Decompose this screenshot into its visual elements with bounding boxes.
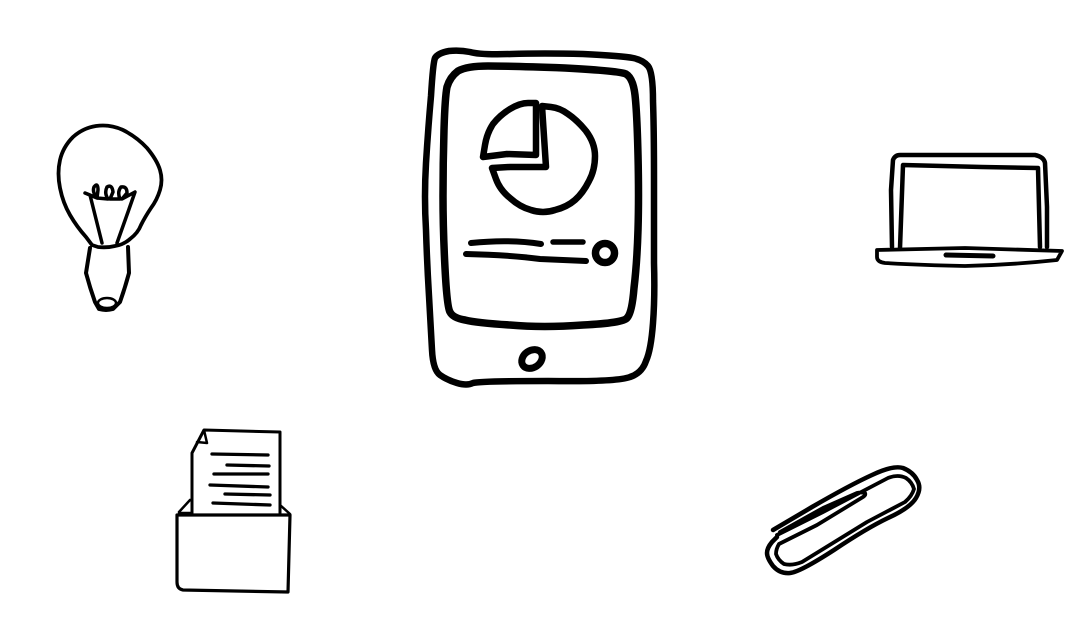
box front <box>177 515 290 592</box>
box right flap <box>280 505 290 514</box>
laptop lid outer <box>891 155 1047 247</box>
text line: top right <box>553 239 583 245</box>
icon: paper clip <box>767 467 919 573</box>
pie chart slice <box>483 103 536 157</box>
box left flap <box>179 500 192 513</box>
bulb base tip <box>98 298 116 308</box>
home button <box>518 346 546 372</box>
clip inner wire <box>776 476 914 565</box>
clip outer wire <box>767 467 919 573</box>
laptop lid inner <box>900 165 1040 248</box>
paper sheet <box>192 430 280 513</box>
trackpad <box>946 255 993 256</box>
icon: light bulb <box>58 126 162 310</box>
pie chart main body <box>492 106 595 212</box>
text line: top left <box>471 241 541 244</box>
bulb glass <box>58 126 162 247</box>
text line: bottom <box>466 254 586 261</box>
icon: document in folder box <box>177 430 290 592</box>
bulb screw base <box>86 247 129 310</box>
small circle button <box>596 244 614 262</box>
icon: tablet with pie chart <box>425 51 654 385</box>
paper corner fold <box>197 430 207 443</box>
tablet screen <box>443 66 638 326</box>
filament <box>85 185 135 243</box>
icon: laptop <box>877 155 1062 266</box>
clip wire overlap <box>805 508 825 519</box>
laptop base <box>877 248 1062 266</box>
document text lines <box>210 454 270 505</box>
tablet outer body <box>425 51 654 385</box>
